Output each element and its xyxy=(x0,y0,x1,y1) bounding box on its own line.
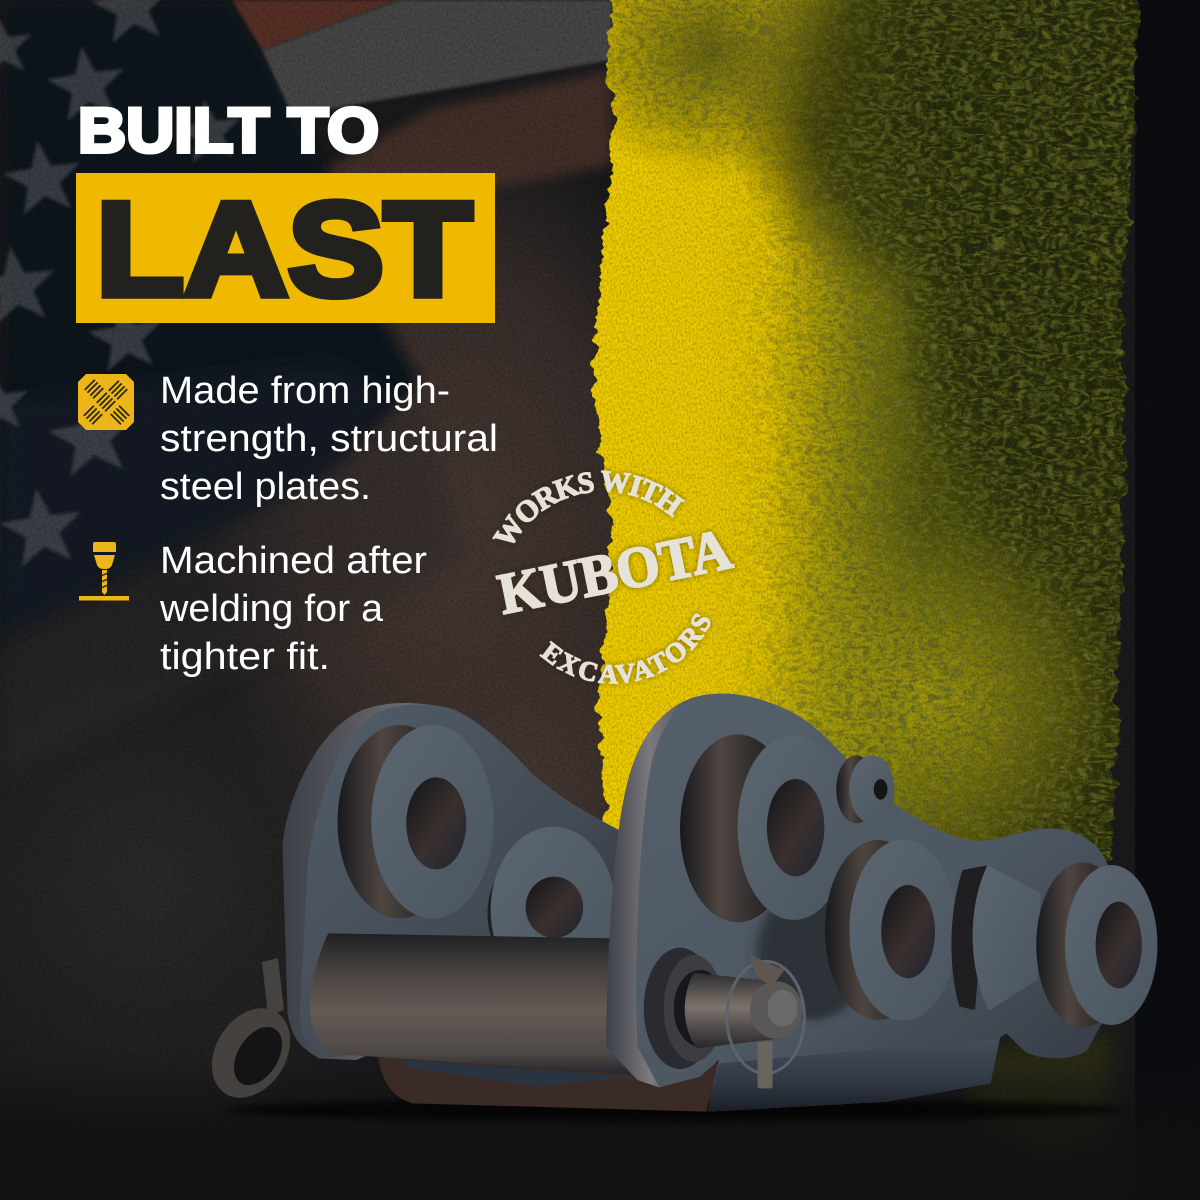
bore boss right end xyxy=(1036,862,1158,1028)
bore boss left upper xyxy=(338,725,494,918)
title: built to: BUILT TO xyxy=(78,96,379,166)
American flag overlay xyxy=(0,0,612,780)
cross pin xyxy=(310,933,631,1074)
title: last banner: LAST xyxy=(96,176,472,324)
small grease boss xyxy=(836,755,894,823)
shaded recess between bosses xyxy=(756,887,869,1020)
yellow paint stroke xyxy=(590,0,1142,862)
text: machined after welding: tighter fit. xyxy=(160,636,330,678)
floor shadow xyxy=(0,1060,1200,1200)
stamp: works with kubota excavators: EXCAVATORS xyxy=(539,610,714,688)
contact shadow xyxy=(225,1098,1125,1122)
hitch pin with collar xyxy=(644,948,802,1069)
lower body, brown side xyxy=(378,1055,719,1112)
text: machined after welding: Machined after xyxy=(160,540,427,582)
text: steel plates: steel plates. xyxy=(160,466,371,508)
retaining ring xyxy=(196,958,306,1112)
text: machined after welding: welding for a xyxy=(159,588,384,630)
text: steel plates xyxy=(160,370,498,508)
right plate xyxy=(606,694,1156,1112)
faded paint below the part xyxy=(960,1030,1112,1160)
text: steel plates: Made from high- xyxy=(160,370,450,412)
left plate xyxy=(282,703,619,1060)
wedge stop xyxy=(951,865,1041,1011)
icon: drill bit xyxy=(79,542,129,600)
excavator coupler part xyxy=(196,694,1157,1122)
lynch clip xyxy=(727,955,804,1088)
stamp: works with kubota excavators: KUBOTA xyxy=(493,516,737,627)
underside blue strip xyxy=(400,1060,638,1087)
bore boss right middle xyxy=(825,839,957,1021)
bore boss right upper xyxy=(680,734,850,922)
stamp: works with kubota excavators xyxy=(492,466,738,688)
text: steel plates: strength, structural xyxy=(160,418,498,460)
bore boss left lower xyxy=(488,827,616,993)
icon: steel plate xyxy=(78,374,134,430)
stamp: works with kubota excavators: WORKS WITH xyxy=(492,466,687,544)
text: machined after welding xyxy=(159,540,427,678)
